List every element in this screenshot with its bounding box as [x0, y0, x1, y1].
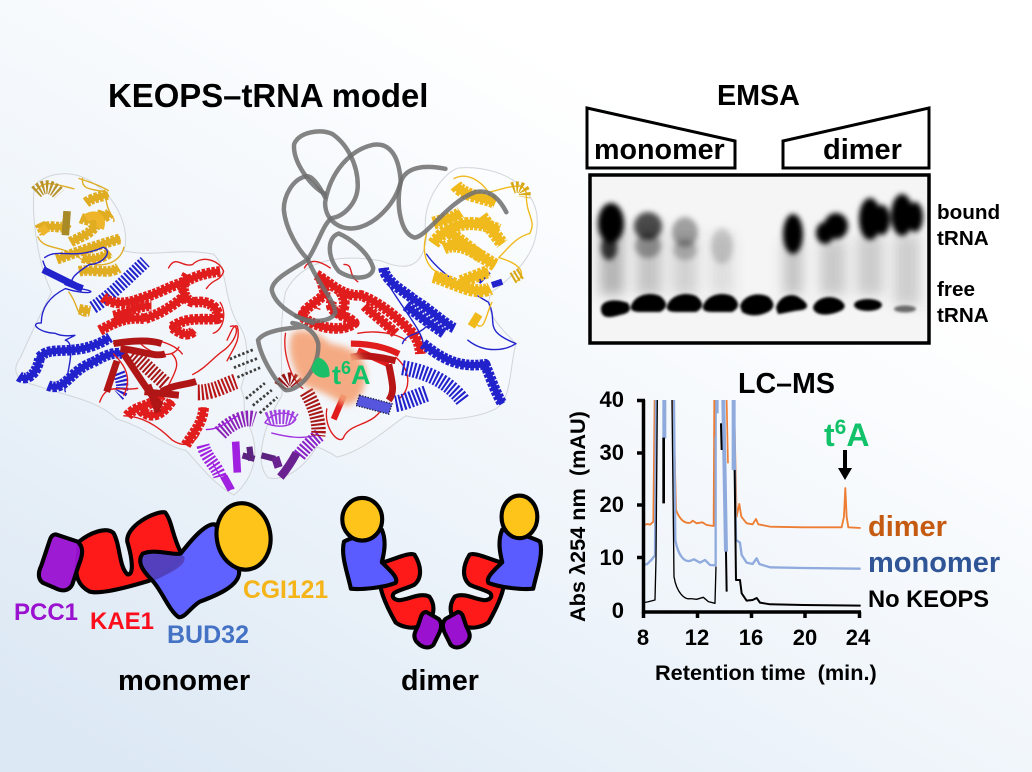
- left half: [342, 498, 441, 647]
- monomer wedge: monomer: [594, 134, 725, 166]
- x tick labels: 20: [793, 625, 817, 650]
- dimer cartoon: [342, 496, 541, 647]
- monomer wedge: [587, 108, 735, 168]
- bound tRNA label: [937, 201, 1000, 250]
- y axis title: Abs λ254 nm (mAU): [565, 411, 590, 622]
- right CGI121 gold subunit: [424, 176, 532, 326]
- x tick labels: 8: [637, 625, 649, 650]
- LC-MS heading: LC–MS: [738, 368, 835, 400]
- monomer trace label: monomer: [868, 547, 1000, 579]
- molecular surface outlines: [16, 168, 537, 495]
- EMSA heading: EMSA: [717, 80, 800, 112]
- axes: [637, 400, 861, 618]
- LC-MS chart: [600, 387, 871, 650]
- dotted dimer contacts: [230, 350, 277, 413]
- t6A green site: [311, 357, 330, 378]
- t6A peak label: A: [846, 417, 869, 453]
- KAE1 red: [76, 512, 181, 592]
- right BUD32 blue subunit: [384, 254, 516, 404]
- left PCC1 purple subunit: [203, 416, 255, 490]
- right PCC1 purple subunit: [265, 413, 320, 477]
- no KEOPS trace: [643, 400, 657, 603]
- left KAE1 red subunit: [100, 259, 238, 445]
- right half: [443, 496, 541, 647]
- t6A model label: t: [332, 360, 341, 390]
- x tick labels: [637, 625, 871, 650]
- right KAE1 red subunit: [280, 261, 420, 440]
- y tick labels: 40: [600, 387, 624, 412]
- CGI121 gold: [211, 499, 276, 574]
- overlap shading: [143, 554, 185, 580]
- y tick labels: 10: [600, 545, 624, 570]
- x axis title: Retention time (min.): [655, 660, 877, 685]
- left CGI121 gold subunit: [36, 178, 124, 316]
- protein structure model: [16, 131, 537, 495]
- title: KEOPS-tRNA model: KEOPS–tRNA model: [108, 77, 428, 114]
- monomer cartoon: [39, 499, 276, 617]
- x tick labels: 24: [846, 625, 871, 650]
- monomer caption: monomer: [118, 665, 250, 697]
- dimer trace: [643, 400, 861, 528]
- t6A peak label: 6: [835, 416, 846, 439]
- dimer caption: dimer: [401, 665, 479, 697]
- bound tRNA label: tRNA: [937, 227, 989, 250]
- monomer trace: [643, 400, 861, 569]
- x tick labels: 12: [685, 625, 709, 650]
- dimer wedge: dimer: [823, 134, 902, 166]
- y tick labels: 0: [612, 598, 624, 623]
- free tRNA label: free: [937, 278, 975, 301]
- y tick labels: 30: [600, 440, 624, 465]
- traces: [643, 400, 861, 606]
- y tick labels: 20: [600, 492, 624, 517]
- PCC1 label: PCC1: [14, 599, 78, 626]
- PCC1 purple: [39, 534, 82, 590]
- x tick labels: 16: [739, 625, 763, 650]
- KAE1 label: KAE1: [90, 608, 154, 635]
- arrow to t6A peak: [838, 450, 852, 480]
- t6A peak label: t: [824, 417, 835, 453]
- BUD32 label: BUD32: [167, 621, 249, 649]
- gel smears: [600, 225, 920, 305]
- active site orange patch: [290, 331, 366, 406]
- tRNA backbone: [258, 131, 506, 390]
- monomer labels: [14, 577, 328, 649]
- CGI121 label: CGI121: [243, 577, 328, 604]
- t6A model label: A: [351, 360, 371, 390]
- dotted blue domain box: [356, 395, 392, 414]
- EMSA gel: [590, 175, 929, 343]
- free tRNA label: [937, 278, 989, 327]
- dimer wedge: [783, 108, 929, 168]
- gel labels: [937, 201, 1000, 327]
- bound tRNA bands: [598, 194, 923, 264]
- bound tRNA label: bound: [937, 201, 1000, 224]
- BUD32 blue: [140, 524, 239, 617]
- dimer interface star: [243, 447, 275, 461]
- free tRNA bands: [601, 294, 916, 317]
- y tick labels: [600, 387, 624, 623]
- dimer trace label: dimer: [868, 511, 947, 543]
- t6A model label: 6: [341, 358, 351, 378]
- free tRNA label: tRNA: [937, 304, 989, 327]
- no KEOPS trace label: No KEOPS: [868, 587, 989, 613]
- left BUD32 blue subunit: [19, 247, 145, 395]
